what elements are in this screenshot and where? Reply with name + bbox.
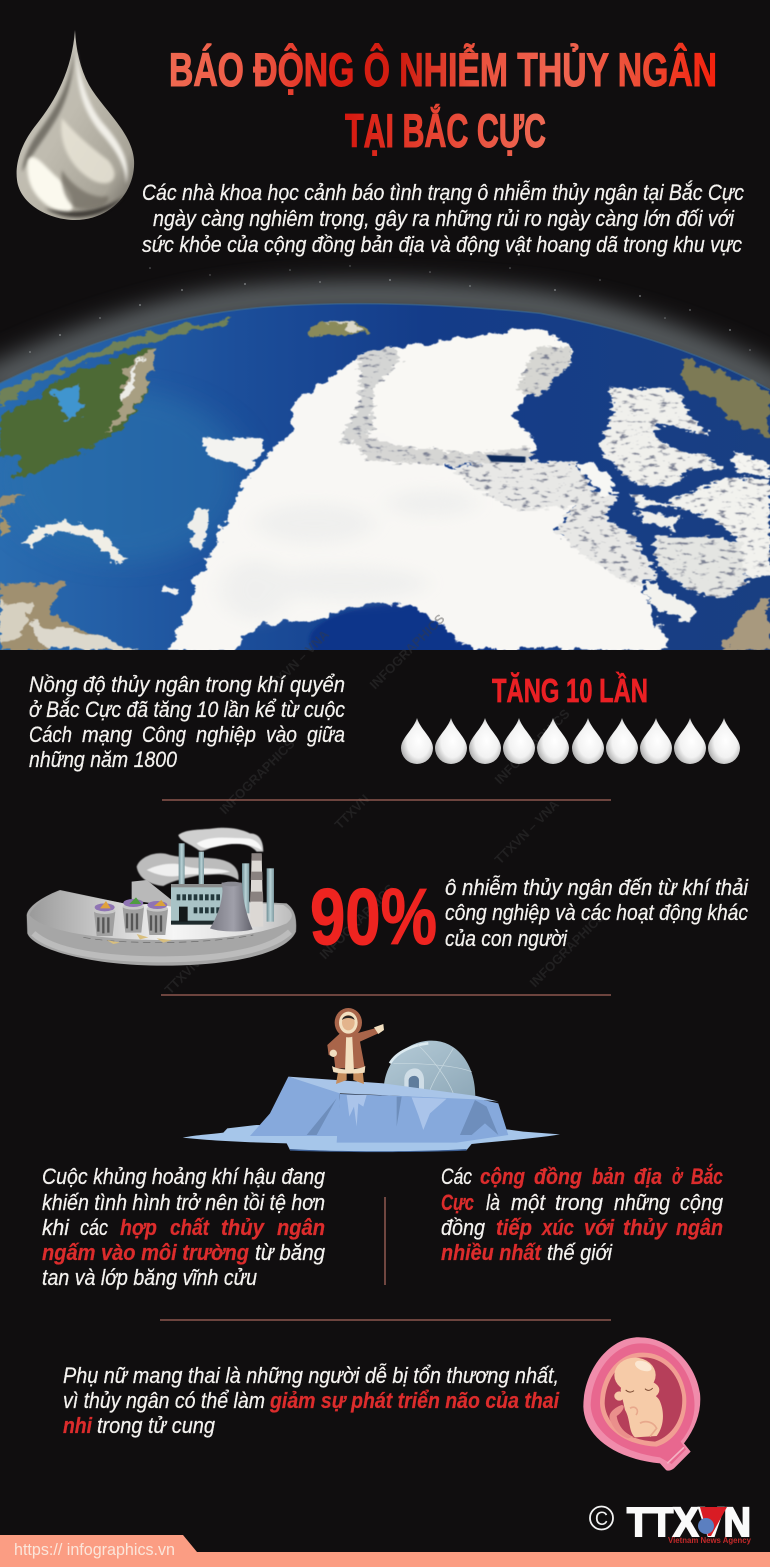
text: concentration increased tenfold: Cách: [29, 722, 72, 747]
text: pregnant women: vì thủy ngân có thể làm: [63, 1388, 265, 1413]
igloo: [383, 1041, 475, 1096]
text: concentration increased tenfold: nghiệp: [196, 722, 256, 747]
title: TẠI BẮC CỰC: [345, 104, 546, 157]
watermarks: [162, 611, 608, 997]
text: climate crisis: tan và lớp băng vĩnh cửu: [42, 1265, 257, 1290]
text: indigenous communities: đồng: [441, 1215, 486, 1240]
trash bins: [94, 897, 172, 944]
text: concentration increased tenfold: vào: [266, 722, 297, 747]
text: indigenous communities: một: [511, 1190, 546, 1215]
text: climate crisis: ngấm vào môi trường: [42, 1240, 250, 1265]
text: indigenous communities: bản: [592, 1164, 625, 1189]
text: climate crisis: thủy: [221, 1215, 266, 1240]
text: pollution source: của con người: [445, 926, 568, 951]
image: Arctic seen from space: [0, 265, 770, 677]
icon: mercury drop: [17, 30, 134, 220]
watermarks: TTXVN: [332, 791, 372, 832]
text: indigenous communities: Bắc: [691, 1164, 723, 1189]
text: pregnant women: Phụ nữ mang thai là những người dễ bị tổn thương nhất,: [63, 1363, 559, 1388]
icon row: ten white drops: [401, 718, 740, 764]
text: climate crisis: Cuộc khủng hoảng khí hậu đang: [42, 1164, 326, 1189]
logo: copyright and TTXVN: Vietnam News Agency: [668, 1535, 751, 1545]
iceberg: [250, 1077, 508, 1143]
text: indigenous communities: ở: [672, 1164, 684, 1189]
text: indigenous communities: cộng: [680, 1190, 724, 1215]
person: [327, 1008, 384, 1084]
factory building: [132, 880, 223, 925]
text: indigenous communities: thủy: [623, 1215, 669, 1240]
illustration: factory on a disc: [27, 828, 296, 966]
watermarks: INFOGRAPHICS: [492, 706, 573, 787]
intro text: [142, 180, 744, 257]
text: concentration increased tenfold: mạng: [82, 722, 133, 747]
text: indigenous communities: là: [486, 1190, 500, 1215]
ice shading: [239, 515, 397, 626]
text: climate crisis: chất: [170, 1215, 210, 1240]
text: indigenous communities: Các: [441, 1164, 472, 1189]
text: pollution source: ô nhiễm thủy ngân đến từ khí thải: [445, 875, 749, 900]
logo: copyright and TTXVN: TTXVN: [627, 1499, 751, 1545]
text: concentration increased tenfold: ở Bắc Cực đã tăng 10 lần kể từ cuộc: [29, 697, 345, 722]
text: pregnant women: [63, 1363, 560, 1438]
stat: 90%: 90%: [310, 872, 437, 961]
text: concentration increased tenfold: Nồng độ thủy ngân trong khí quyển: [29, 672, 345, 697]
text: indigenous communities: xúc: [541, 1215, 574, 1240]
cooling tower: [210, 882, 253, 931]
text: indigenous communities: đồng: [534, 1164, 582, 1189]
footer band: https:// infographics.vn: [14, 1541, 175, 1559]
text: climate crisis: hợp: [120, 1215, 157, 1240]
text: concentration increased tenfold: giữa: [307, 722, 345, 747]
text: climate crisis: ngân: [277, 1215, 325, 1240]
text: indigenous communities: cộng: [480, 1164, 525, 1189]
chimneys: [179, 843, 274, 927]
watermarks: TTXVN – VNA: [492, 796, 562, 867]
text: pregnant women: nhi: [63, 1413, 93, 1438]
title: [169, 43, 717, 157]
text: indigenous communities: [441, 1164, 724, 1265]
watermarks: TTXVN: [162, 956, 202, 997]
text: indigenous communities: ngân: [676, 1215, 723, 1240]
text: indigenous communities: địa: [634, 1164, 662, 1189]
watermarks: INFOGRAPHICS: [217, 736, 298, 817]
footer band: [0, 1535, 770, 1567]
text: pregnant women: giảm sự phát triển não của thai: [269, 1388, 560, 1413]
smoke: [137, 828, 263, 886]
stars: [29, 265, 751, 353]
watermarks: TTXVN – VNA: [262, 626, 332, 697]
watermarks: INFOGRAPHICS: [367, 611, 448, 692]
text: concentration increased tenfold: Công: [142, 722, 187, 747]
text: pregnant women: trong tử cung: [97, 1413, 216, 1438]
logo: copyright and TTXVN: C: [595, 1509, 608, 1530]
watermarks: INFOGRAPHICS: [527, 909, 608, 990]
illustration: fetus in womb: [583, 1337, 700, 1471]
fetus: [609, 1358, 663, 1438]
text: climate crisis: khiến tình hình trở nên tồi tệ hơn: [42, 1190, 325, 1215]
text: indigenous communities: những: [614, 1190, 671, 1215]
text: concentration increased tenfold: [29, 672, 345, 772]
illustration: Inuit person, igloo, and iceberg: [183, 1008, 560, 1152]
water: [183, 1125, 560, 1152]
disc base: [27, 890, 296, 966]
text: indigenous communities: thế giới: [547, 1240, 613, 1265]
watermarks: INFOGRAPHICS: [317, 881, 398, 962]
text: indigenous communities: với: [584, 1215, 615, 1240]
text: indigenous communities: nhiều nhất: [441, 1240, 543, 1265]
heading: tăng 10 lần: TĂNG 10 LẦN: [492, 672, 648, 709]
text: indigenous communities: Cực: [441, 1190, 474, 1215]
text: concentration increased tenfold: những năm 1800: [29, 747, 178, 772]
text: climate crisis: các: [80, 1215, 108, 1240]
text: climate crisis: [42, 1164, 326, 1290]
text: pollution source: [445, 875, 749, 951]
text: climate crisis: khi: [42, 1215, 70, 1240]
text: indigenous communities: trong: [555, 1190, 604, 1215]
text: indigenous communities: tiếp: [496, 1215, 532, 1240]
text: climate crisis: từ băng: [255, 1240, 326, 1265]
